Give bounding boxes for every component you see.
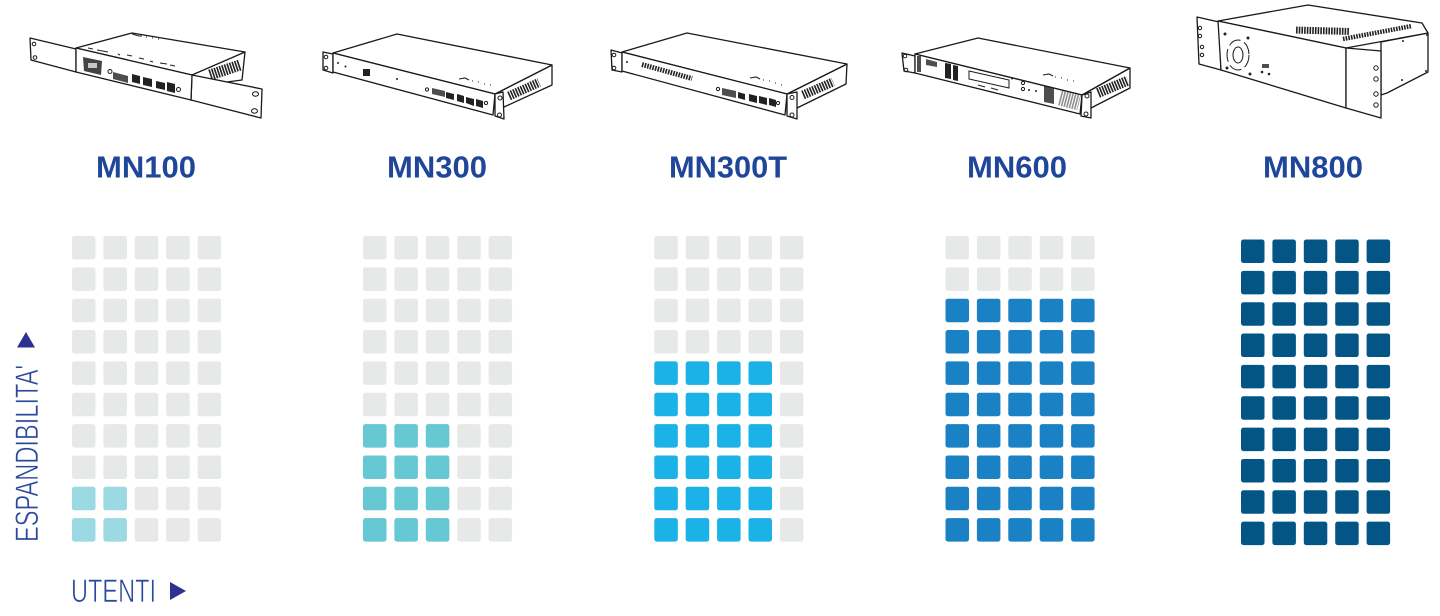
device: MN100	[30, 33, 262, 118]
device: MN300T	[611, 33, 847, 119]
device: MN800	[1197, 5, 1428, 118]
arrow: right	[170, 582, 186, 600]
axis label: UTENTI: UTENTI	[71, 573, 156, 609]
grid: MN300	[363, 236, 512, 542]
device: MN600	[902, 38, 1130, 118]
device: MN300	[323, 34, 552, 119]
grid: MN800	[1241, 240, 1390, 545]
grid: MN300T	[654, 236, 803, 542]
axis label: ESPANDIBILITA': ESPANDIBILITA'	[9, 365, 45, 542]
grid: MN600	[946, 236, 1095, 542]
grid: MN100	[72, 236, 221, 542]
arrow: up	[17, 332, 35, 348]
title: MN600: MN600	[967, 150, 1067, 184]
title: MN300T: MN300T	[669, 150, 787, 184]
title: MN800: MN800	[1263, 150, 1363, 184]
title: MN100: MN100	[96, 150, 196, 184]
title: MN300: MN300	[387, 150, 487, 184]
